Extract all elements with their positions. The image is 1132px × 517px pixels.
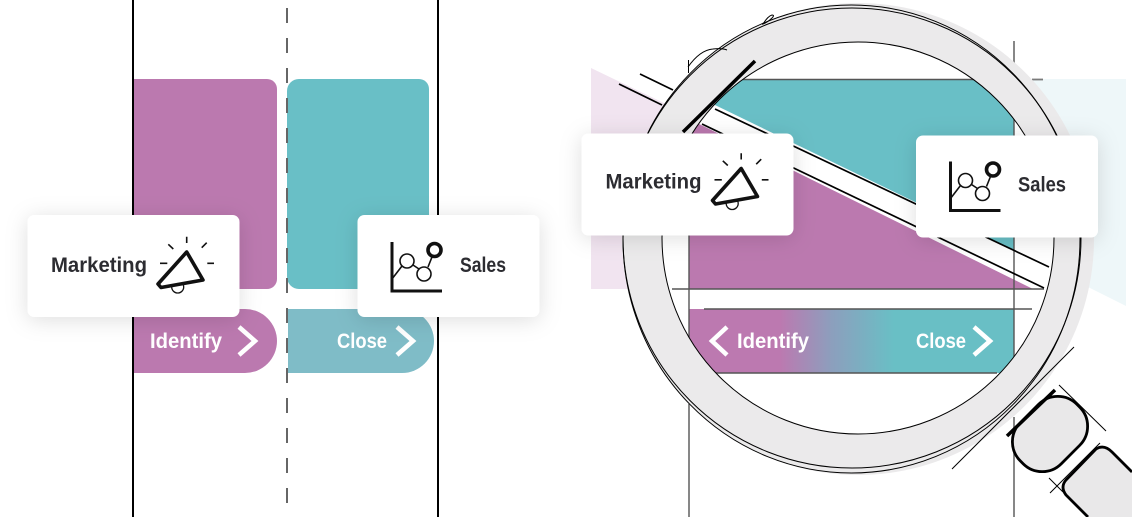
icon: line chart	[392, 242, 442, 291]
panel: magnified funnel (right)	[582, 3, 1132, 517]
construction lines outside lens	[689, 41, 1043, 517]
arrow: close right	[974, 327, 990, 355]
arrow: identify stage	[134, 309, 277, 373]
bar: gradient identify to close	[689, 309, 1014, 373]
panel: funnel columns (left)	[28, 0, 540, 517]
label: close: Close	[916, 330, 966, 353]
wedge: pink marketing	[689, 119, 1033, 289]
label: identify: Identify	[737, 330, 809, 353]
card: marketing: Marketing	[51, 254, 147, 277]
arrow: close stage: Close	[337, 330, 387, 353]
wedge: teal sales	[714, 80, 1014, 250]
card: marketing	[28, 215, 240, 317]
icon: megaphone zoomed	[712, 153, 768, 210]
column: sales teal	[287, 79, 429, 289]
lens contents	[662, 78, 1054, 374]
shape: pale pink background	[591, 68, 689, 289]
arrow: close stage	[288, 309, 434, 373]
handle grip	[1063, 447, 1132, 517]
column: marketing pink	[134, 79, 277, 289]
arrow: identify left	[712, 327, 727, 355]
card: marketing zoomed	[582, 134, 794, 236]
sketch lines of ring	[623, 5, 1081, 473]
vertical line: right boundary	[437, 0, 439, 517]
construction lines in lens	[660, 79, 1044, 373]
lens white disc	[662, 122, 1054, 289]
card: marketing zoomed: Marketing	[606, 170, 702, 194]
card: sales: Sales	[460, 254, 506, 277]
card: sales	[358, 215, 540, 317]
shape: pale teal background	[1014, 79, 1126, 306]
vertical line: dashed divider	[286, 8, 288, 517]
magnifier ring	[622, 3, 1094, 475]
ring thick highlight line	[683, 61, 755, 132]
card: sales zoomed: Sales	[1018, 174, 1066, 196]
handle collar	[1001, 385, 1099, 483]
magnifier handle	[1001, 385, 1132, 517]
card: sales zoomed	[916, 136, 1098, 238]
vertical line: left boundary	[132, 0, 134, 517]
white diagonal band lines	[619, 74, 1049, 288]
arrow: identify stage: Identify	[150, 330, 222, 353]
icon: megaphone	[158, 237, 214, 293]
icon: line chart zoomed	[950, 162, 1000, 210]
